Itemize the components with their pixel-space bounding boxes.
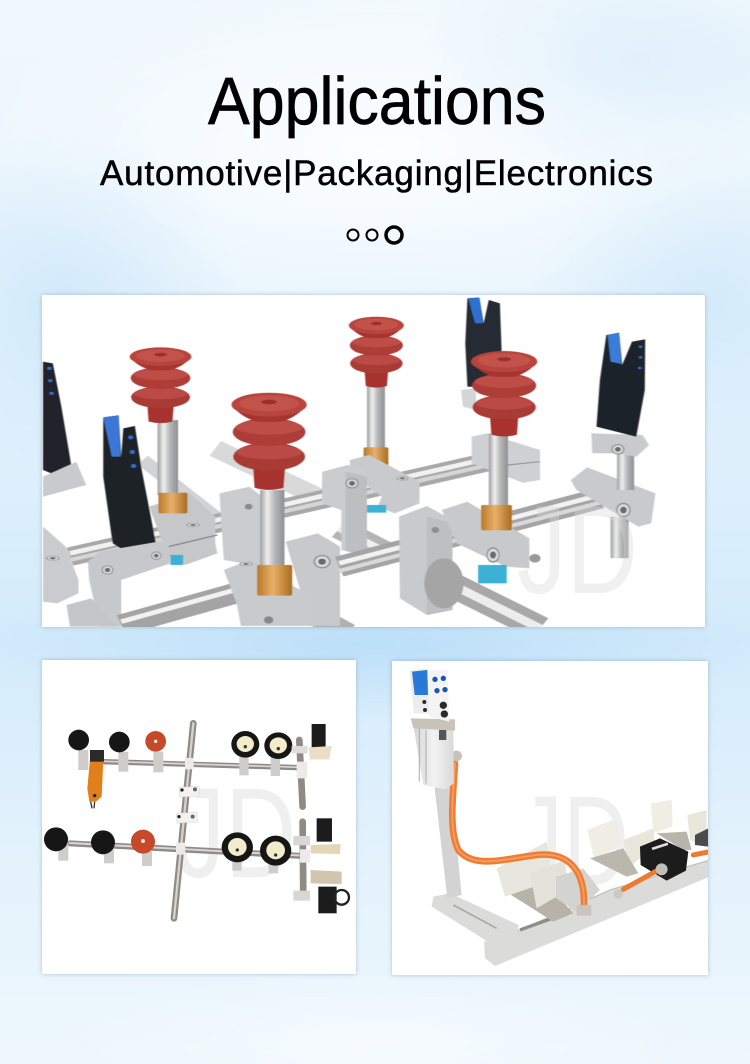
fittings	[614, 889, 623, 899]
watermark: JD	[517, 770, 629, 913]
bracket under pads left	[510, 887, 574, 922]
front central blocks	[220, 487, 262, 567]
rods	[70, 723, 303, 918]
front left mount	[66, 598, 117, 627]
column	[433, 775, 462, 898]
orange tubes	[452, 763, 710, 905]
middle-back block	[322, 465, 353, 552]
clamps	[58, 750, 280, 873]
left edge gripper and mount	[43, 362, 72, 474]
left gripper	[103, 415, 156, 555]
watermark: JD	[517, 481, 638, 620]
cylinder	[413, 725, 454, 789]
panel: lower left photo card	[42, 660, 356, 974]
black and red cups	[68, 730, 89, 750]
ring cups	[231, 731, 259, 758]
black junction box	[640, 838, 688, 881]
illustration: vacuum rod frame	[44, 723, 349, 918]
plates	[176, 786, 200, 823]
panel: large photo card	[42, 295, 705, 627]
subtitle: Automotive|Packaging|Electronics	[100, 154, 653, 193]
title: Applications	[208, 64, 546, 139]
block	[556, 868, 600, 912]
back rod	[70, 458, 489, 560]
watermark: JD	[176, 762, 296, 905]
illustration: suction cups and grippers on rods	[43, 297, 655, 633]
valve	[409, 668, 429, 713]
rail	[484, 860, 710, 966]
panel: lower right photo card	[392, 661, 708, 975]
central block	[399, 506, 452, 615]
right column	[442, 502, 529, 568]
back diagonal rod and plate	[143, 448, 540, 633]
illustration: pneumatic rail with orange tube	[409, 668, 710, 966]
page indicator dots	[348, 227, 402, 243]
orange gripper	[87, 759, 104, 802]
right gripper and bracket	[611, 517, 629, 558]
front rod	[121, 495, 600, 625]
rear cup column	[367, 383, 385, 450]
rear gripper	[465, 297, 502, 387]
black actuators	[312, 724, 326, 748]
left block and cup column	[149, 493, 217, 565]
front column with big cup	[260, 490, 284, 568]
back right block	[472, 433, 540, 483]
foam pads	[497, 842, 553, 897]
left bracket	[88, 540, 170, 627]
